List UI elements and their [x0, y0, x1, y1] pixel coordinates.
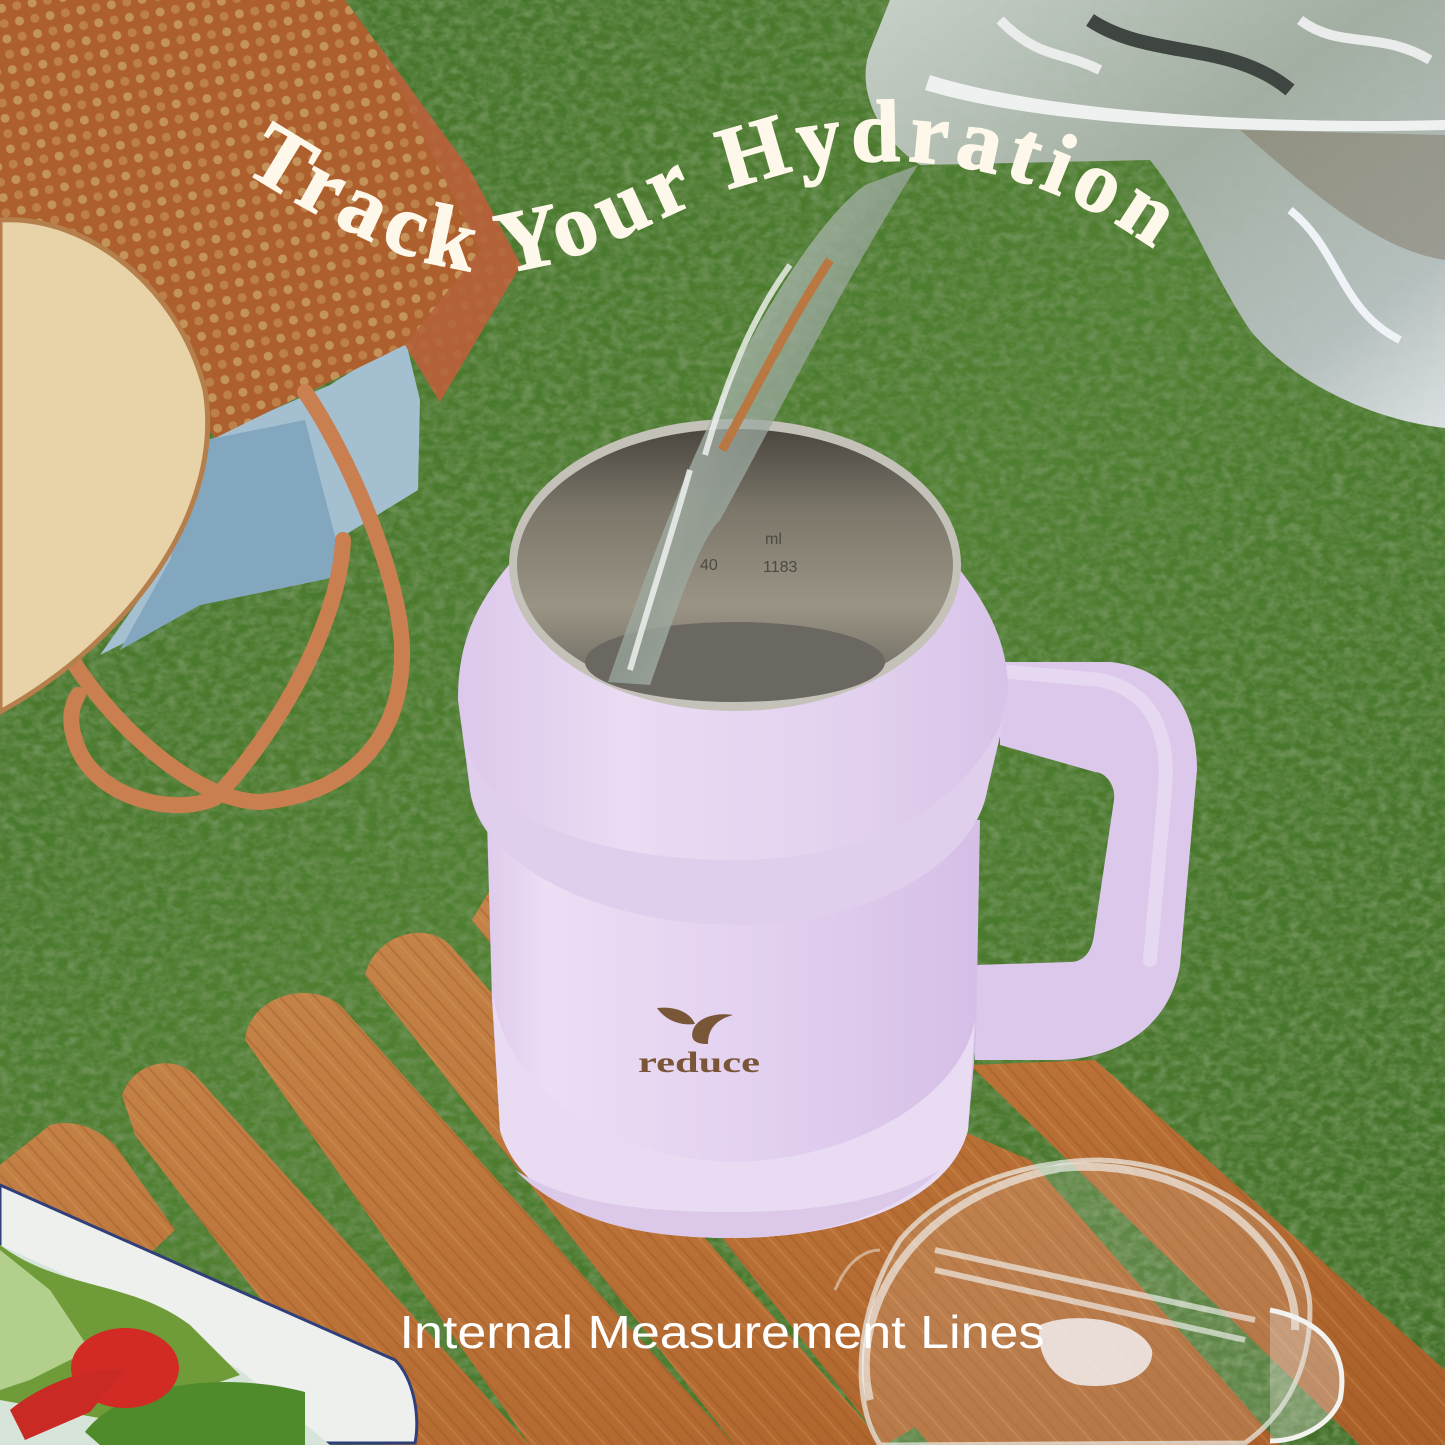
mug opening [509, 419, 961, 711]
logo leaf mark [657, 1008, 733, 1044]
salad plate [0, 1185, 417, 1445]
woven bag [0, 0, 521, 438]
wooden table slats [0, 890, 1445, 1445]
logo wordmark: reduce [638, 1046, 760, 1079]
water stream [608, 165, 918, 685]
mug handle [975, 662, 1197, 1060]
clear lid [835, 1160, 1342, 1445]
mug shoulder and lid band [458, 560, 1008, 925]
bag handles [71, 392, 402, 805]
heading: Track Your Hydration [252, 98, 1169, 272]
mug opening: 1183 [763, 559, 798, 576]
mug body [487, 820, 980, 1238]
reduce logo [638, 1008, 760, 1079]
glass pitcher [866, 0, 1445, 428]
caption: Internal Measurement Lines [400, 1306, 1044, 1358]
denim cloth [100, 338, 420, 655]
straw hat [0, 220, 208, 712]
mug opening: 40 [700, 557, 718, 574]
mug opening: ml [765, 531, 782, 548]
